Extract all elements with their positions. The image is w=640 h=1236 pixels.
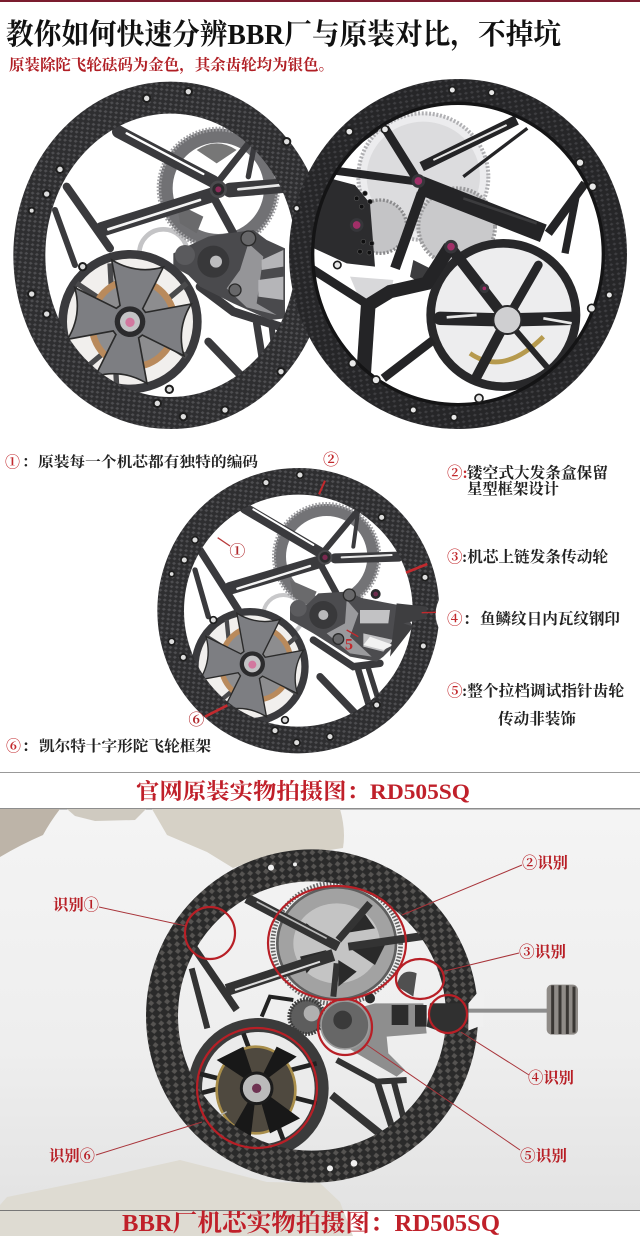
red arrows and numbers: ⑥: [188, 711, 204, 729]
holes: [268, 862, 357, 1171]
callout 4: ：: [463, 611, 479, 628]
mechanism plate: [290, 589, 413, 662]
callout 2: 星型框架设计: [467, 479, 559, 498]
inspection labels: ⑤识别: [520, 1147, 567, 1165]
panel: BBR hand-held photo: [0, 808, 640, 1236]
glove knuckle: [152, 809, 344, 868]
carbon outer ring: [171, 481, 426, 740]
star frame bars: [195, 508, 398, 717]
carbon outer ring: [162, 865, 462, 1167]
inner rim: [313, 103, 603, 405]
inspection labels: [49, 854, 574, 1165]
photo background: [0, 808, 640, 1210]
callout 5: 传动非装饰: [498, 709, 576, 728]
inspection labels: 识别①: [53, 896, 99, 914]
star frame bars: [192, 898, 430, 1135]
crown: [547, 985, 578, 1035]
section divider bottom: [0, 1210, 640, 1211]
callout 4: 鱼鳞纹日内瓦纹钢印: [480, 609, 620, 628]
tourbillon: [63, 254, 197, 389]
callout 4: ④: [447, 610, 463, 628]
gears behind frame: [350, 113, 495, 300]
label 1: 原装每一个机芯都有独特的编码: [38, 453, 259, 471]
gears behind frame: [139, 129, 278, 277]
crown notch: [468, 992, 483, 1031]
label 1: ①: [5, 454, 20, 471]
ruby jewel: [211, 182, 226, 197]
carbon outer ring: [29, 98, 312, 413]
callout 2: ②:: [447, 464, 468, 482]
movement photo: left, tourbillon side: [28, 88, 312, 420]
screw holes: [28, 88, 290, 420]
mechanism plate: [173, 230, 285, 320]
tourbillon: [195, 1025, 322, 1152]
red arrows and numbers: 5: [345, 636, 353, 653]
screw holes: [294, 87, 613, 421]
crown notch: [436, 595, 445, 632]
top rule: [0, 0, 640, 2]
glove bottom: [0, 1160, 353, 1236]
ruby jewels: [351, 176, 488, 292]
inspection labels: ④识别: [528, 1069, 574, 1087]
BBR movement: [162, 862, 578, 1171]
section divider: [0, 772, 640, 773]
inspection labels: ②识别: [522, 854, 568, 872]
inspection labels: ③识别: [519, 943, 566, 961]
label 1: ：: [22, 455, 36, 471]
screw holes: [168, 472, 428, 746]
callout 6: 凯尔特十字形陀飞轮框架: [39, 737, 211, 755]
left carbon plate: [307, 177, 375, 267]
star frame: [308, 120, 585, 378]
callout 6: ：: [22, 739, 37, 755]
red arrows and numbers: [188, 481, 436, 729]
callout 5: ⑤: [447, 682, 463, 700]
number 2 marker: ②: [323, 451, 339, 469]
ruby jewels: [319, 551, 331, 564]
stamp block: [427, 1003, 468, 1035]
glove top centre: [67, 809, 146, 821]
callout 5: [447, 681, 624, 728]
crown stamp spoke: [390, 603, 427, 657]
annotated movement: [168, 472, 445, 746]
callout 5: :整个拉档调试指针齿轮: [462, 681, 624, 700]
movement photo: right, dial side: [290, 80, 626, 428]
callout 6: ⑥: [6, 738, 21, 755]
gears behind frame: [263, 504, 379, 635]
section heading: official photo: 官网原装实物拍摄图：RD505SQ: [136, 779, 470, 804]
callout 2: [447, 463, 608, 498]
callout 2: 镂空式大发条盒保留: [467, 463, 608, 482]
subtitle: 原装除陀飞轮砝码为金色，其余齿轮均为银色。: [9, 55, 334, 75]
red leader lines: [96, 865, 529, 1155]
red inspection circles: [185, 886, 467, 1148]
inspection labels: 识别⑥: [49, 1147, 95, 1165]
callout 3: :机芯上链发条传动轮: [462, 547, 608, 566]
tourbillon: [195, 609, 307, 722]
red arrows and numbers: ①: [229, 543, 245, 561]
plate jewel settings: [354, 191, 374, 255]
small star plate: [431, 243, 576, 387]
winding stem: [468, 1009, 548, 1013]
gear and springs: [273, 883, 401, 1004]
winding gears: [262, 997, 324, 1080]
bridge plate: [337, 1003, 427, 1077]
title: 教你如何快速分辨BBR厂与原装对比，不掉坑: [6, 18, 561, 51]
glove top left: [0, 809, 60, 857]
callout 3: ③: [447, 548, 463, 566]
carbon outer ring: [301, 91, 615, 417]
star frame bars: [55, 132, 292, 383]
